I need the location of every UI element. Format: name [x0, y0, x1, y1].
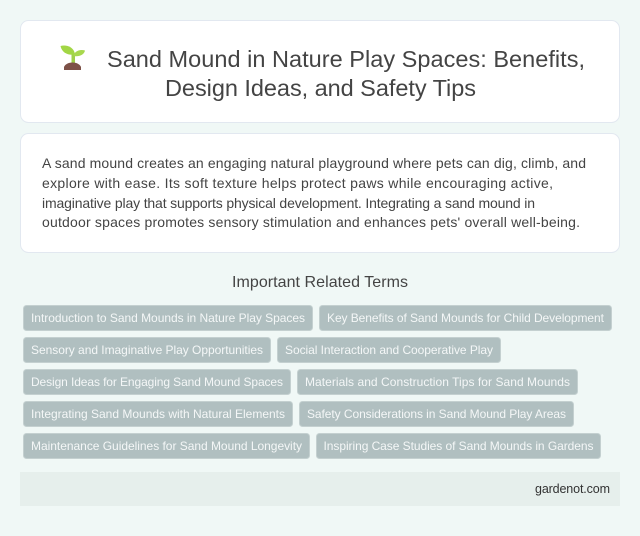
intro paragraph: explore with ease. Its soft texture helps protect paws while encouraging active, [42, 175, 553, 191]
intro paragraph: A sand mound creates an engaging natural playground where pets can dig, climb, and [42, 155, 586, 171]
tag [24, 338, 270, 362]
tag [278, 338, 500, 362]
tag: Integrating Sand Mounds with Natural Elements [31, 407, 285, 421]
title: Design Ideas, and Safety Tips [165, 75, 476, 101]
tag: Materials and Construction Tips for Sand Mounds [305, 375, 570, 389]
tag [316, 434, 600, 458]
tag: Maintenance Guidelines for Sand Mound Longevity [31, 439, 302, 453]
tag: Social Interaction and Cooperative Play [285, 343, 493, 357]
title [107, 46, 585, 101]
header panel [20, 20, 620, 122]
tag [24, 370, 290, 394]
tags list [24, 306, 612, 458]
tag [24, 306, 312, 330]
tag: Key Benefits of Sand Mounds for Child Development [327, 311, 605, 325]
intro paragraph: outdoor spaces promotes sensory stimulation and enhances pets' overall well-being. [42, 214, 580, 230]
tag: Sensory and Imaginative Play Opportunities [31, 343, 263, 357]
tag [24, 434, 310, 458]
tag [300, 402, 574, 426]
tag: Inspiring Case Studies of Sand Mounds in Gardens [324, 439, 594, 453]
intro paragraph [42, 155, 586, 230]
tag [24, 402, 292, 426]
tag [298, 370, 578, 394]
tag: Safety Considerations in Sand Mound Play Areas [307, 407, 566, 421]
tag: Design Ideas for Engaging Sand Mound Spaces [31, 375, 283, 389]
icon: seedling [60, 46, 85, 70]
tag: Introduction to Sand Mounds in Nature Play Spaces [31, 311, 305, 325]
title: Sand Mound in Nature Play Spaces: Benefits, [107, 46, 585, 72]
intro paragraph: imaginative play that supports physical development. Integrating a sand mound in [42, 195, 535, 211]
panel: intro text [20, 134, 620, 252]
tag [320, 306, 612, 330]
heading: Important Related Terms: Important Related Terms [232, 274, 408, 291]
footer source: gardenot.com [535, 482, 610, 496]
footer bar [20, 472, 620, 506]
